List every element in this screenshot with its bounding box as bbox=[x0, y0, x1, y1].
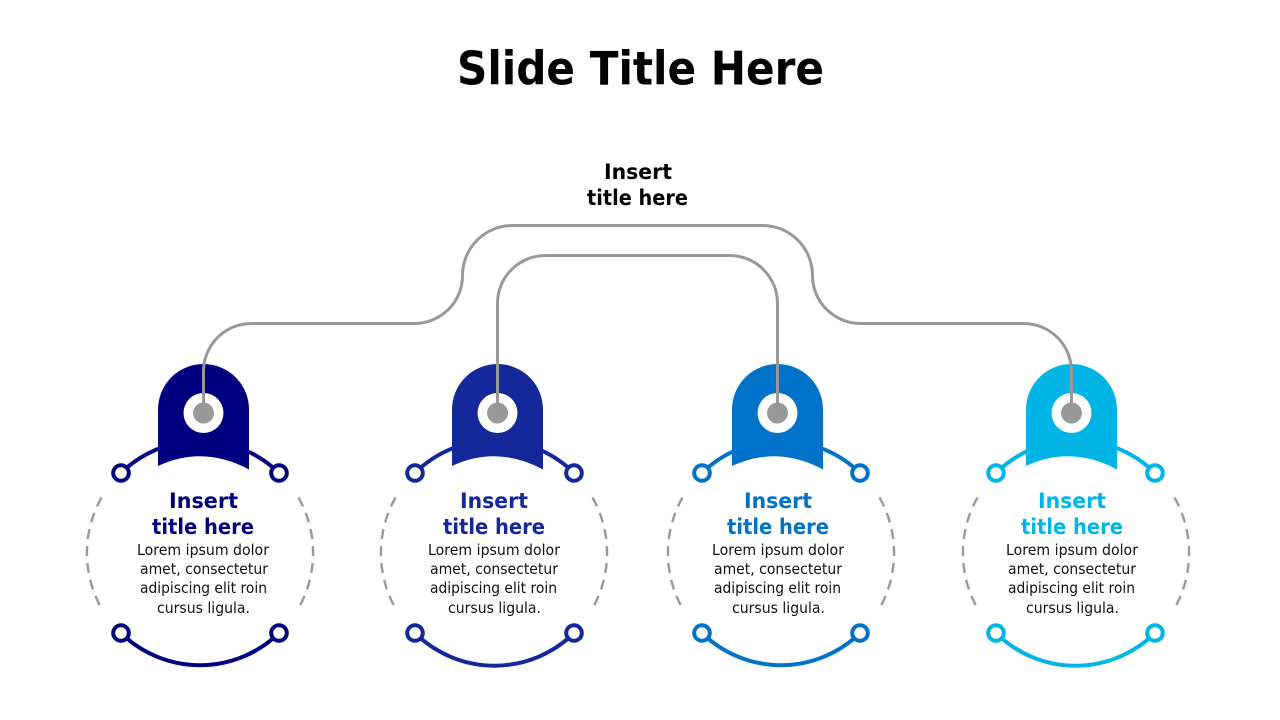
column 3 heading bbox=[727, 489, 829, 540]
column 2 body text: cursus ligula. bbox=[448, 599, 541, 617]
column 3 body text: cursus ligula. bbox=[732, 599, 825, 617]
top heading: Insert bbox=[604, 160, 672, 185]
column 3 body text: adipiscing elit roin bbox=[714, 579, 841, 597]
top heading bbox=[587, 160, 688, 211]
icon: tag bbox=[1026, 364, 1117, 470]
column 2 body text: adipiscing elit roin bbox=[430, 579, 557, 597]
connector end dots bbox=[193, 402, 1082, 424]
column 2 heading bbox=[443, 489, 545, 540]
panel: column 1 bbox=[87, 364, 313, 665]
arcs and nodes bbox=[113, 441, 287, 665]
column 4 heading: Insert bbox=[1038, 489, 1106, 514]
dashed circle sides bbox=[381, 498, 607, 608]
panel: column 2 bbox=[381, 364, 607, 666]
column 3 heading: title here bbox=[727, 515, 829, 540]
column 4 body text: Lorem ipsum dolor bbox=[1006, 541, 1139, 559]
column 2 body text: Lorem ipsum dolor bbox=[428, 541, 561, 559]
column 4 body text: adipiscing elit roin bbox=[1008, 579, 1135, 597]
column 1 body text bbox=[137, 541, 270, 617]
column 1 heading bbox=[152, 489, 254, 540]
column 2 body text: amet, consectetur bbox=[430, 560, 559, 578]
column 4 heading bbox=[1021, 489, 1123, 540]
column 3 body text: Lorem ipsum dolor bbox=[712, 541, 845, 559]
column 3 body text: amet, consectetur bbox=[714, 560, 843, 578]
panel: column 4 bbox=[963, 364, 1189, 666]
panel: column 3 bbox=[668, 364, 894, 665]
column 1 body text: cursus ligula. bbox=[157, 599, 250, 617]
column 1 body text: Lorem ipsum dolor bbox=[137, 541, 270, 559]
column 4 body text bbox=[1006, 541, 1139, 617]
icon: tag bbox=[158, 364, 249, 470]
column 4 body text: amet, consectetur bbox=[1008, 560, 1137, 578]
column 4 body text: cursus ligula. bbox=[1026, 599, 1119, 617]
column 1 heading: title here bbox=[152, 515, 254, 540]
column 3 heading: Insert bbox=[744, 489, 812, 514]
top heading: title here bbox=[587, 186, 688, 211]
arcs and nodes bbox=[694, 441, 868, 665]
column 1 body text: adipiscing elit roin bbox=[140, 579, 267, 597]
dashed circle sides bbox=[668, 498, 894, 608]
icon: tag bbox=[732, 364, 823, 470]
icon: tag bbox=[452, 364, 543, 470]
column 2 heading: title here bbox=[443, 515, 545, 540]
dashed circle sides bbox=[87, 498, 313, 608]
title: Slide Title Here bbox=[457, 42, 824, 96]
connector lines bbox=[203, 226, 1072, 413]
arcs and nodes bbox=[988, 440, 1163, 666]
column 2 body text bbox=[428, 541, 561, 617]
dashed circle sides bbox=[963, 498, 1189, 608]
column 1 body text: amet, consectetur bbox=[140, 560, 269, 578]
column 3 body text bbox=[712, 541, 845, 617]
column 2 heading: Insert bbox=[460, 489, 528, 514]
arcs and nodes bbox=[407, 440, 582, 666]
column 4 heading: title here bbox=[1021, 515, 1123, 540]
column 1 heading: Insert bbox=[169, 489, 238, 514]
